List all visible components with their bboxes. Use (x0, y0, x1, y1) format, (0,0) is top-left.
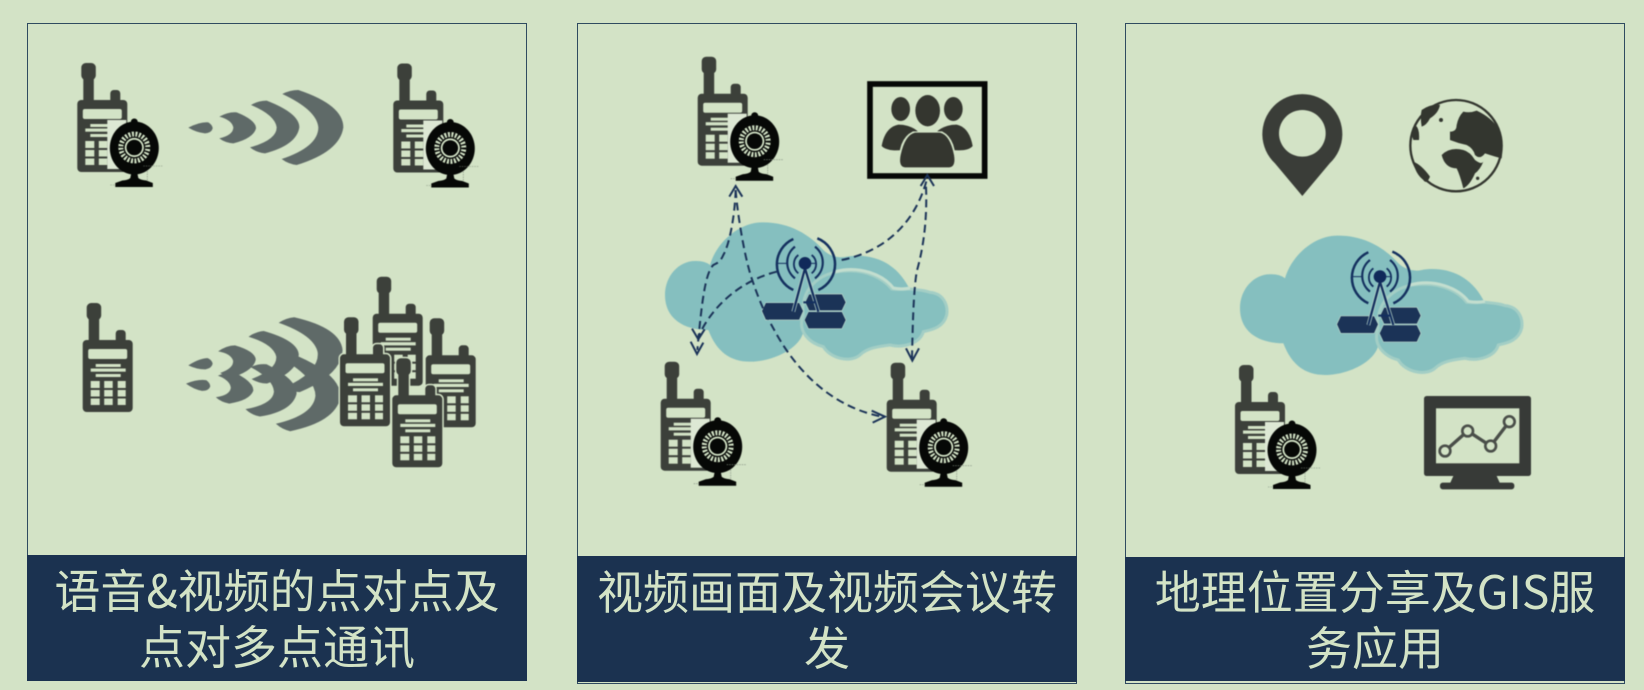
caption: panel 1: 语音&视频的点对点及 (54, 556, 500, 622)
caption: panel 3: 地理位置分享及GIS服 (1155, 557, 1595, 623)
caption: panel 2: 视频画面及视频会议转 (597, 557, 1057, 623)
icon: signal waves, point to point (188, 90, 343, 165)
icon: video conference screen (870, 84, 985, 176)
caption: panel 2 (577, 556, 1077, 682)
icon artwork: location services (1234, 93, 1532, 490)
icon: radio with webcam, left (77, 63, 162, 187)
caption: panel 2: 发 (804, 613, 850, 679)
caption: panel 1: 点对多点通讯 (139, 612, 415, 678)
icon: group of four radios (340, 277, 476, 467)
icon: map pin (1262, 94, 1342, 196)
icon: radio with webcam, bottom right (887, 363, 972, 487)
icon: radio with webcam, top (698, 57, 783, 181)
caption: panel 3: 务应用 (1306, 613, 1444, 679)
icon: cloud with radio tower (665, 222, 947, 362)
icon: radio with webcam, bottom left (661, 362, 746, 486)
icon artwork: cloud network diagram (660, 56, 988, 488)
icon: signal waves, point to multipoint (182, 313, 346, 436)
icon artwork: radios and signal waves (76, 62, 478, 468)
arrows: dashed signal paths (691, 175, 934, 423)
panel: location sharing and GIS (1125, 23, 1625, 684)
panel: point-to-point voice and video (27, 23, 527, 680)
caption: panel 3 (1125, 557, 1625, 681)
icon: GIS monitor with line chart (1424, 396, 1531, 489)
caption: panel 1 (27, 555, 527, 681)
icon: radio with webcam (1235, 365, 1320, 489)
panel: video and conference relay (577, 23, 1077, 684)
icon: radio with webcam, right (393, 64, 478, 188)
icon: single radio (83, 303, 133, 412)
icon: cloud with radio tower (1240, 236, 1522, 375)
icon: globe (1410, 100, 1502, 191)
